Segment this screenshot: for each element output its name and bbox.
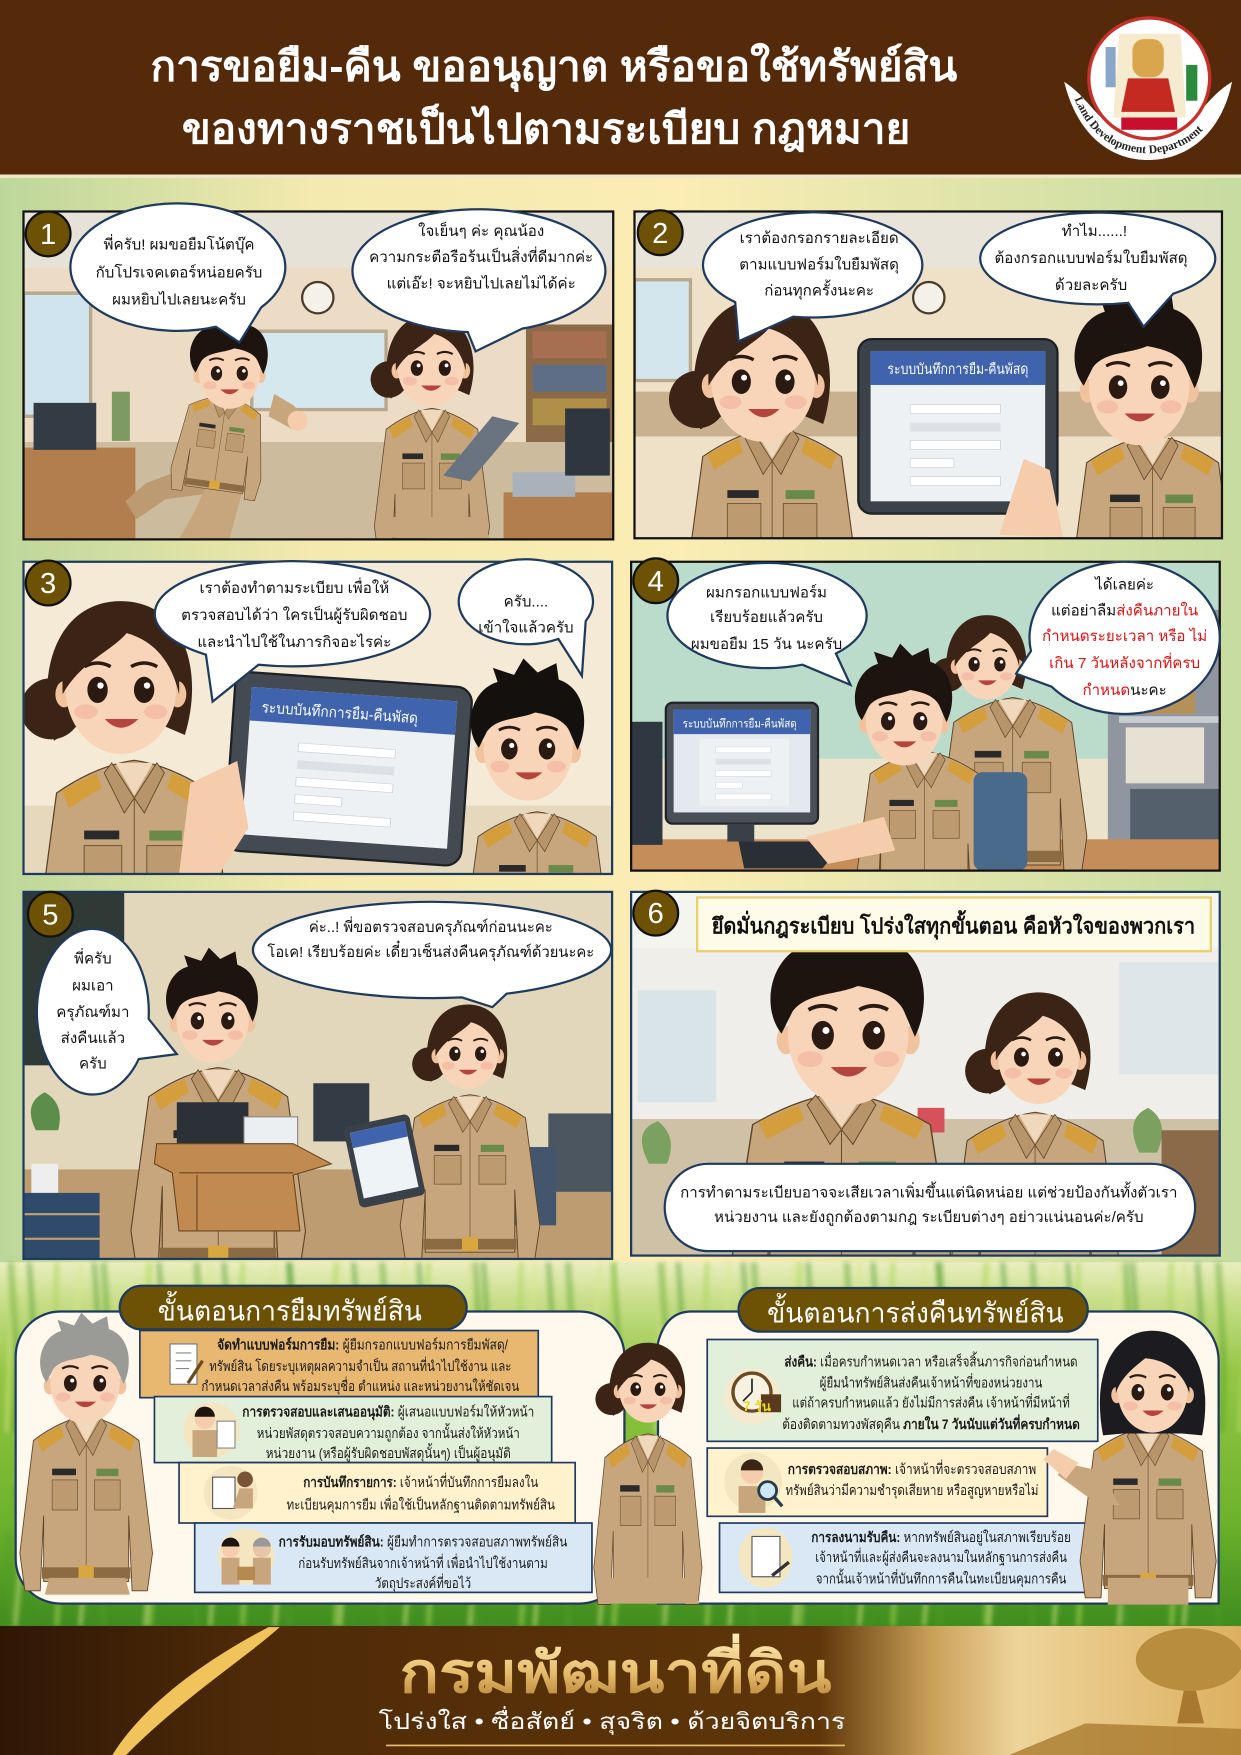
step 1 box: จัดทำแบบฟอร์มการยืม: ผู้ยืมกรอกแบบฟอร์มการยืมพัสดุ/ — [217, 1337, 508, 1354]
title — [151, 43, 957, 152]
closing speech bubble: การทำตามระเบียบอาจจะเสียเวลาเพิ่มขึ้นแต่นิดหน่อย แต่ช่วยป้องกันทั้งตัวเรา — [680, 1181, 1177, 1201]
badge 4 — [633, 558, 678, 603]
speech bubble: panel 3 man: เข้าใจแล้วครับ — [478, 618, 574, 636]
grass background — [0, 1262, 1241, 1632]
speech bubble: panel 4 woman with red warning: ได้เลยค่ะ — [1094, 576, 1154, 594]
speech bubble: panel 4 woman with red warning: กำหนดนะคะ — [1082, 682, 1167, 699]
step 3 box: จากนั้นเจ้าหน้าที่บันทึกการคืนในทะเบียนคุมการคืน — [816, 1568, 1067, 1587]
step 4 box: วัตถุประสงค์ที่ขอไว้ — [375, 1574, 471, 1592]
speech bubble: panel 2 man — [980, 213, 1215, 327]
speech bubble: panel 1 woman: ความกระตือรือร้นเป็นสิ่งที่ดีมากค่ะ — [369, 246, 593, 266]
character: woman — [950, 992, 1121, 1316]
step 3 box — [179, 1463, 575, 1523]
speech bubble: panel 4 man: ผมกรอกแบบฟอร์ม — [706, 584, 827, 602]
speech bubble: panel 4 woman with red warning: แต่อย่าลืมส่งคืนภายใน — [1051, 601, 1198, 619]
speech bubble: panel 1 woman — [352, 209, 605, 351]
step 1 box — [140, 1331, 538, 1398]
speech bubble: panel 5 man — [37, 929, 177, 1095]
icon: document and pen — [170, 1344, 203, 1384]
speech bubble: panel 2 woman: ก่อนทุกครั้งนะคะ — [764, 279, 874, 300]
speech bubble: panel 4 woman with red warning: กำหนดระยะเวลา หรือ ไม่ — [1042, 627, 1207, 645]
tablet with form: ระบบบันทึกการยืม-คืนพัสดุ — [887, 361, 1028, 378]
title: ของทางราชเป็นไปตามระเบียบ กฎหมาย — [182, 103, 910, 152]
character: man at computer — [806, 644, 1027, 913]
computer monitor with form: ระบบบันทึกการยืม-คืนพัสดุ — [683, 716, 797, 730]
tablet with form — [858, 339, 1057, 514]
footer banner — [0, 1626, 1241, 1755]
speech bubble: panel 2 woman: เราต้องกรอกรายละเอียด — [740, 230, 899, 247]
step 2 box: การตรวจสอบสภาพ: เจ้าหน้าที่จะตรวจสอบสภาพ — [788, 1460, 1036, 1477]
step 4 box — [195, 1523, 592, 1592]
heading pill: ขั้นตอนการส่งคืนทรัพย์สิน — [767, 1293, 1064, 1329]
character: central woman officer — [594, 1343, 702, 1604]
step 3 box: ทะเบียนคุมการยืม เพื่อใช้เป็นหลักฐานติดตามทรัพย์สิน — [286, 1496, 555, 1514]
step 2 box: การตรวจสอบและเสนออนุมัติ: ผู้เสนอแบบฟอร์มให้หัวหน้า — [242, 1404, 534, 1421]
speech bubble: panel 5 man: ครับ — [79, 1056, 107, 1073]
step 1 box: ส่งคืน: เมื่อครบกำหนดเวลา หรือเสร็จสิ้นภารกิจก่อนกำหนด — [784, 1351, 1078, 1369]
icon: tree — [1136, 1628, 1241, 1723]
badge 3 — [26, 561, 70, 605]
speech bubble: panel 2 man: ทำไม......! — [1062, 222, 1127, 240]
title: การขอยืม-คืน ขออนุญาต หรือขอใช้ทรัพย์สิน — [151, 43, 957, 93]
panel 5: returning the equipment — [23, 892, 612, 1276]
heading pill — [120, 1286, 467, 1329]
step 1 box: แต่ถ้าครบกำหนดแล้ว ยังไม่มีการส่งคืน เจ้าหน้าที่มีหน้าที่ — [792, 1394, 1070, 1411]
panel 4: filling the form on computer — [631, 562, 1220, 913]
speech bubble: panel 4 woman with red warning: เกิน 7 วันหลังจากที่ครบ — [1049, 652, 1200, 672]
character: woman with tablet — [343, 1005, 540, 1261]
speech bubble: panel 5 man: ผมเอา — [72, 977, 114, 994]
speech bubble: panel 1 woman: แต่เอ๊ะ! จะหยิบไปเลยไม่ได้ค่ะ — [387, 275, 576, 293]
character: woman — [20, 601, 232, 993]
character: woman with black hair, gesturing — [1047, 1331, 1216, 1605]
gold swoosh — [112, 1627, 280, 1755]
speech bubble: panel 3 man — [459, 559, 593, 676]
speech bubble: panel 4 man — [667, 563, 867, 685]
step 1 box: กำหนดเวลาส่งคืน พร้อมระบุชื่อ ตำแหน่ง และหน่วยงานให้ชัดเจน — [201, 1377, 520, 1395]
step 2 box — [707, 1448, 1047, 1516]
speech bubble: panel 5 woman — [253, 902, 611, 1007]
tablet with form: ระบบบันทึกการยืม-คืนพัสดุ — [261, 699, 419, 728]
heading pill — [739, 1288, 1088, 1332]
closing speech bubble: หน่วยงาน และยังถูกต้องตามกฎ ระเบียบต่างๆ อย่าวแน่นอนค่ะ/ครับ — [714, 1209, 1144, 1226]
footer title: กรมพัฒนาที่ดิน — [399, 1633, 831, 1704]
speech bubble: panel 1 man: พี่ครับ! ผมขอยืมโน้ตบุ๊ค — [104, 234, 255, 255]
speech bubble: panel 5 woman: ค่ะ..! พี่ขอตรวจสอบครุภัณฑ์ก่อนนะคะ — [309, 916, 553, 937]
speech bubble: panel 4 woman with red warning — [1016, 562, 1220, 714]
speech bubble: panel 2 man: ต้องกรอกแบบฟอร์มใบยืมพัสดุ — [994, 249, 1188, 268]
footer motto: โปร่งใส • ซื่อสัตย์ • สุจริต • ด้วยจิตบริการ — [379, 1706, 845, 1735]
step 2 box: ทรัพย์สินว่ามีความชำรุดเสียหาย หรือสูญหายหรือไม่ — [786, 1482, 1038, 1499]
speech bubble: panel 5 man: พี่ครับ — [74, 947, 112, 967]
icon: handing over — [218, 1529, 274, 1585]
step 2 box — [154, 1397, 552, 1463]
speech bubble: panel 2 woman: ตามแบบฟอร์มใบยืมพัสดุ — [739, 256, 899, 275]
icon: recording in register — [204, 1466, 257, 1520]
character: woman — [669, 298, 859, 636]
badge 4: 4 — [648, 566, 664, 598]
speech bubble: panel 2 man: ด้วยละครับ — [1055, 277, 1127, 294]
panel: returning procedure — [658, 1288, 1219, 1605]
header band — [0, 0, 1241, 178]
badge 6 — [633, 891, 678, 936]
speech bubble: panel 3 woman: และนำไปใช้ในภารกิจอะไรค่ะ — [197, 633, 391, 651]
panel 6: closing message — [631, 892, 1220, 1322]
panel 3: why follow rules — [20, 562, 612, 993]
step 1 box: ผู้ยืมนำทรัพย์สินส่งคืนเจ้าหน้าที่ของหน่วยงาน — [820, 1374, 1043, 1392]
character: running man — [125, 311, 308, 539]
speech bubble: panel 3 woman: ตรวจสอบได้ว่า ใครเป็นผู้รับผิดชอบ — [181, 605, 407, 624]
speech bubble: panel 5 woman: โอเค! เรียบร้อยค่ะ เดี๋ยวเซ็นส่งคืนครุภัณฑ์ด้วยนะคะ — [267, 940, 594, 962]
badge 1: 1 — [40, 219, 56, 251]
character: man carrying box — [131, 948, 305, 1276]
tablet with form — [224, 671, 473, 866]
step 3 box: การลงนามรับคืน: หากทรัพย์สินอยู่ในสภาพเรียบร้อย — [811, 1529, 1071, 1546]
step 3 box: การบันทึกรายการ: เจ้าหน้าที่บันทึกการยืมลงใน — [303, 1473, 539, 1490]
step 1 box: ทรัพย์สิน โดยระบุเหตุผลความจำเป็น สถานที่นำไปใช้งาน และ — [209, 1357, 511, 1375]
speech bubble: panel 3 woman — [155, 561, 430, 702]
step 2 box: หน่วยพัสดุตรวจสอบความถูกต้อง จากนั้นส่งให้หัวหน้า — [257, 1423, 520, 1442]
character: woman with tablet — [371, 315, 519, 558]
character: man — [463, 658, 611, 989]
speech bubble: panel 1 woman: ใจเย็นๆ ค่ะ คุณน้อง — [418, 221, 544, 241]
computer monitor with form — [666, 703, 845, 868]
step 4 box: การรับมอบทรัพย์สิน: ผู้ยืมทำการตรวจสอบสภาพทรัพย์สิน — [279, 1534, 568, 1551]
number badges — [26, 210, 683, 937]
step 2 box: หน่วยงาน (หรือผู้รับผิดชอบพัสดุนั้นๆ) เป็นผู้อนุมัติ — [266, 1443, 511, 1462]
closing speech bubble — [665, 1164, 1195, 1251]
logo: Land Development Department: Land Development Department — [1074, 96, 1203, 154]
speech bubble: panel 1 man — [70, 203, 285, 342]
icon: officer writing — [184, 1402, 239, 1458]
panel 2: explaining the form — [634, 211, 1236, 636]
character: senior officer — [20, 1313, 153, 1595]
icon: inspector with magnifier — [724, 1453, 782, 1513]
speech bubble: panel 1 man: กับโปรเจคเตอร์หน่อยครับ — [96, 264, 262, 282]
step 1 box: ต้องติดตามทวงพัสดุคืน ภายใน 7 วันนับแต่วันที่ครบกำหนด — [782, 1414, 1080, 1433]
step 3 box — [720, 1523, 1093, 1592]
step 3 box: เจ้าหน้าที่และผู้ส่งคืนจะลงนามในหลักฐานการส่งคืน — [815, 1548, 1067, 1566]
speech bubble: panel 5 man: ส่งคืนแล้ว — [61, 1030, 125, 1047]
icon: clock and 7 days: 7 วัน — [743, 1399, 772, 1414]
motto banner — [697, 897, 1211, 951]
speech bubble: panel 3 man: ครับ.... — [504, 594, 548, 611]
speech bubble: panel 1 man: ผมหยิบไปเลยนะครับ — [112, 290, 246, 308]
character: man — [730, 913, 953, 1322]
motto banner: ยึดมั่นกฎระเบียบ โปร่งใสทุกขั้นตอน คือหัวใจของพวกเรา — [711, 909, 1195, 940]
speech bubble: panel 4 man: ผมขอยืม 15 วัน นะครับ — [691, 636, 842, 653]
step 1 box — [707, 1339, 1098, 1441]
character: man from behind — [1070, 285, 1236, 633]
speech bubble: panel 5 man: ครุภัณฑ์มา — [56, 1003, 129, 1022]
badge 6: 6 — [648, 898, 664, 930]
icon: signing paper — [739, 1527, 792, 1588]
badge 1 — [26, 211, 70, 256]
speech bubble: panel 4 man: เรียบร้อยแล้วครับ — [710, 609, 823, 626]
logo: Land Development Department — [1064, 16, 1232, 160]
badge 2 — [638, 210, 683, 255]
step 4 box: ก่อนรับทรัพย์สินจากเจ้าหน้าที่ เพื่อนำไปใช้งานตาม — [298, 1554, 548, 1571]
badge 3: 3 — [40, 568, 56, 600]
heading pill: ขั้นตอนการยืมทรัพย์สิน — [158, 1290, 422, 1326]
speech bubble: panel 3 woman: เราต้องทำตามระเบียบ เพื่อให้ — [199, 577, 389, 597]
cardboard box with laptop and projector — [154, 1102, 331, 1231]
panel 1: running to borrow — [23, 211, 613, 558]
badge 5: 5 — [42, 899, 58, 931]
speech bubble: panel 2 woman — [703, 212, 922, 341]
badge 2: 2 — [652, 218, 668, 250]
character: woman behind — [931, 615, 1087, 875]
panel: borrowing procedure — [16, 1286, 624, 1604]
glow line — [386, 1745, 845, 1746]
badge 5 — [28, 892, 73, 937]
icon: clock and 7 days — [724, 1369, 781, 1425]
